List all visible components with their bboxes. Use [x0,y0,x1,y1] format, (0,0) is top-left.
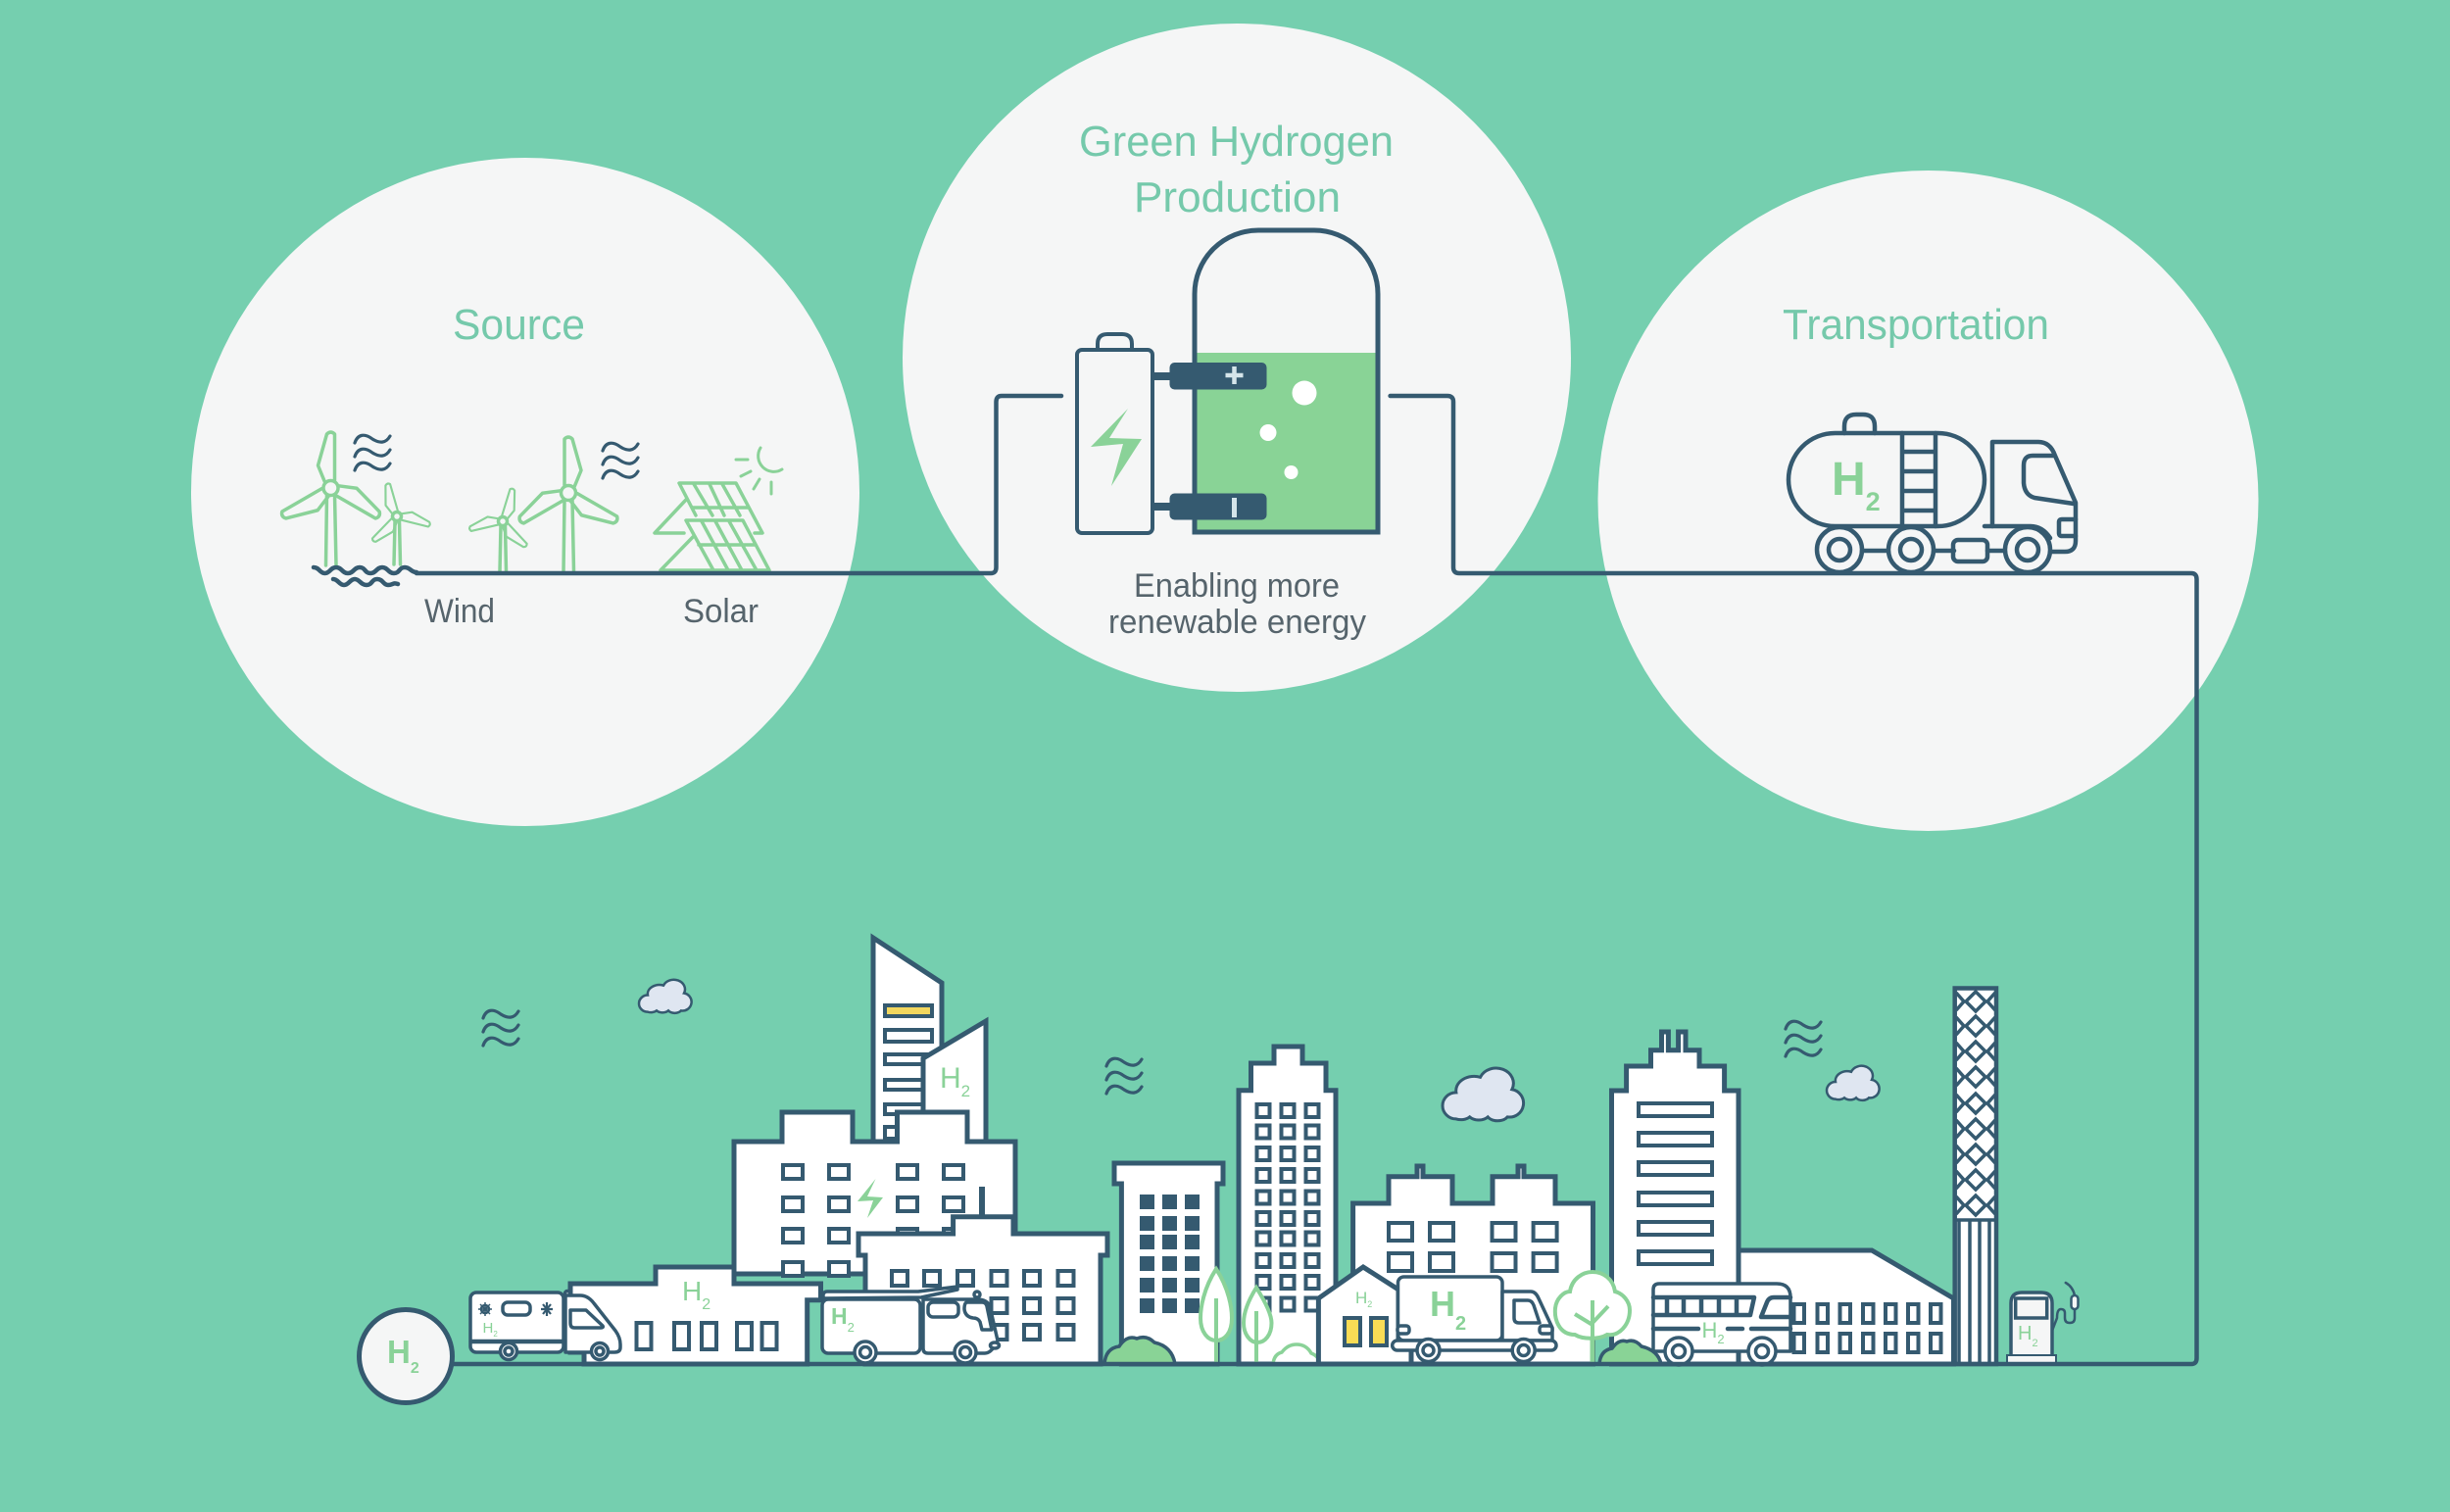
heading: transportation: Transportation [1783,301,2049,349]
bush left [1104,1338,1175,1364]
pointed tree two [1244,1288,1272,1364]
icon: sun [736,448,782,494]
wind lines city left [483,1010,518,1046]
second angled tower: H [940,1062,961,1095]
text: enabling more renewable energy: Enabling more [1134,567,1340,605]
double decker bus [1653,1284,1790,1365]
cloud right [1827,1066,1880,1100]
panel: green hydrogen production [903,24,1571,692]
pointed tree one [1200,1269,1232,1364]
icon: wind turbine small right [467,488,527,571]
icon: hydrogen tanker truck: H [1832,454,1866,506]
twin block building [1353,1166,1593,1364]
factory building [1739,1250,1954,1364]
label: wind: Wind [424,593,495,630]
low hydrogen building: 2 [702,1296,710,1313]
label: solar: Solar [683,593,759,630]
pipeline: production to city via transportation [453,396,2197,1364]
panel: source [191,158,859,826]
double decker bus: 2 [1717,1332,1725,1346]
icon: hydrogen tanker truck [1788,415,2076,572]
icon: solar panels [655,483,769,570]
house: H [1355,1289,1367,1307]
text: enabling more renewable energy [1108,567,1366,641]
icon: water waves [314,567,416,585]
city skyline [470,938,2078,1365]
hydrogen fuel pump [2007,1283,2078,1364]
hydrogen source node: H [387,1334,411,1370]
dark window building [1114,1163,1223,1364]
production circle [903,24,1571,692]
icon: hydrogen tanker truck: 2 [1866,487,1881,516]
icon: negative electrode [1152,494,1266,519]
refrigerated van: H [482,1320,493,1337]
refrigerated van: 2 [493,1330,498,1339]
hydrogen delivery truck: H [1430,1284,1455,1324]
hydrogen source node [359,1309,453,1403]
wind lines city centre [1106,1058,1142,1094]
hydrogen fuel pump: 2 [2032,1338,2038,1349]
heading: green hydrogen production [1079,118,1394,221]
refrigerated van [470,1292,620,1360]
icon: electrolyzer tank [1195,230,1378,532]
second angled tower: 2 [961,1082,970,1100]
heading: source: Source [453,301,585,349]
front mid-rise building [858,1217,1107,1364]
house [1318,1267,1411,1364]
hydrogen bus with roof tank: H [831,1303,848,1329]
icon: wind lines left [355,435,390,470]
icon: battery [1077,334,1152,533]
text: enabling more renewable energy: renewable energy [1108,604,1366,641]
tall angled tower [873,938,942,1146]
double decker bus: H [1701,1318,1717,1342]
bush white [1273,1344,1320,1364]
low hydrogen building [570,1267,821,1364]
hydrogen fuel pump: H [2018,1323,2032,1344]
house: 2 [1367,1299,1372,1309]
pipeline: source to production [416,396,1061,573]
hydrogen delivery truck [1393,1277,1556,1362]
hydrogen source node: 2 [411,1360,419,1377]
transportation circle [1597,171,2258,831]
bush right [1599,1341,1661,1364]
cloud centre [1443,1068,1524,1121]
icon: wind lines right [603,443,638,478]
icon: positive electrode [1152,363,1266,390]
icon: wind turbine large left [280,432,385,565]
lattice chimney [1955,988,1996,1364]
round tree [1555,1272,1630,1364]
hydrogen bus with roof tank: 2 [848,1320,855,1335]
second angled tower [923,1021,986,1146]
source circle [191,158,859,826]
icon: wind turbine large right [514,437,618,571]
tall slab tower [1611,1032,1739,1364]
cloud left [639,980,692,1013]
panel: transportation [1597,171,2258,831]
tall window tower [1239,1047,1336,1364]
hydrogen delivery truck: 2 [1455,1313,1466,1335]
heading: green hydrogen production: Green Hydrogen [1079,118,1394,166]
wind lines city right [1786,1021,1821,1056]
low hydrogen building: H [682,1276,702,1306]
heading: green hydrogen production: Production [1134,173,1341,221]
main office building [734,1112,1015,1303]
icon: wind turbine small left [371,483,432,564]
hydrogen bus with roof tank [822,1287,1000,1363]
